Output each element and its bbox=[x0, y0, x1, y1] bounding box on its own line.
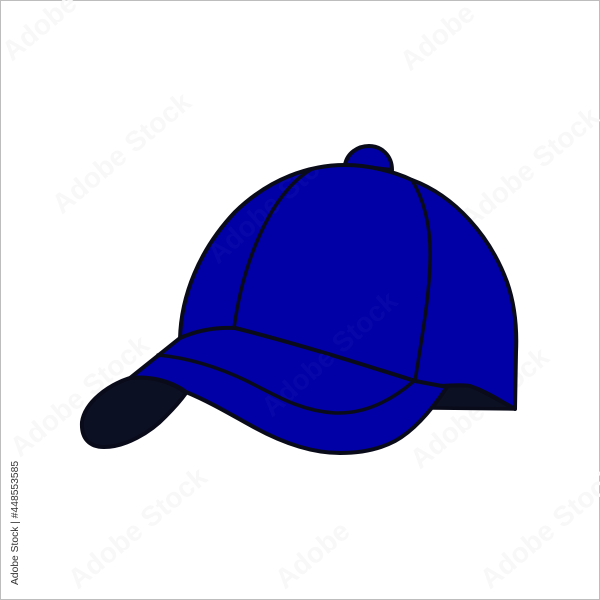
stock id caption: Adobe Stock | #448553585 bbox=[10, 461, 21, 585]
watermarks over cap: Adobe Stock bbox=[255, 285, 404, 422]
crown bbox=[180, 165, 516, 409]
visor stitch line bbox=[158, 355, 414, 413]
rear underside dark shape bbox=[433, 385, 515, 409]
cap bbox=[82, 146, 516, 453]
visor seam bbox=[235, 328, 415, 381]
watermarks: Adobe Stock bbox=[62, 461, 213, 595]
watermarks: Adobe bbox=[269, 515, 356, 595]
watermarks over cap bbox=[211, 170, 330, 356]
crown seam left bbox=[234, 170, 310, 328]
watermarks: Adobe Stock bbox=[404, 341, 555, 475]
visor bbox=[130, 328, 447, 453]
crown seam right bbox=[412, 180, 430, 381]
watermarks over cap: Adobe Stock bbox=[201, 132, 350, 269]
under-brim dark shape bbox=[82, 378, 186, 447]
watermarks: Adobe Stock bbox=[46, 86, 197, 220]
watermarks: Adobe Stock bbox=[4, 329, 155, 463]
icon: top button bbox=[345, 146, 392, 170]
cap seams bbox=[158, 170, 430, 413]
